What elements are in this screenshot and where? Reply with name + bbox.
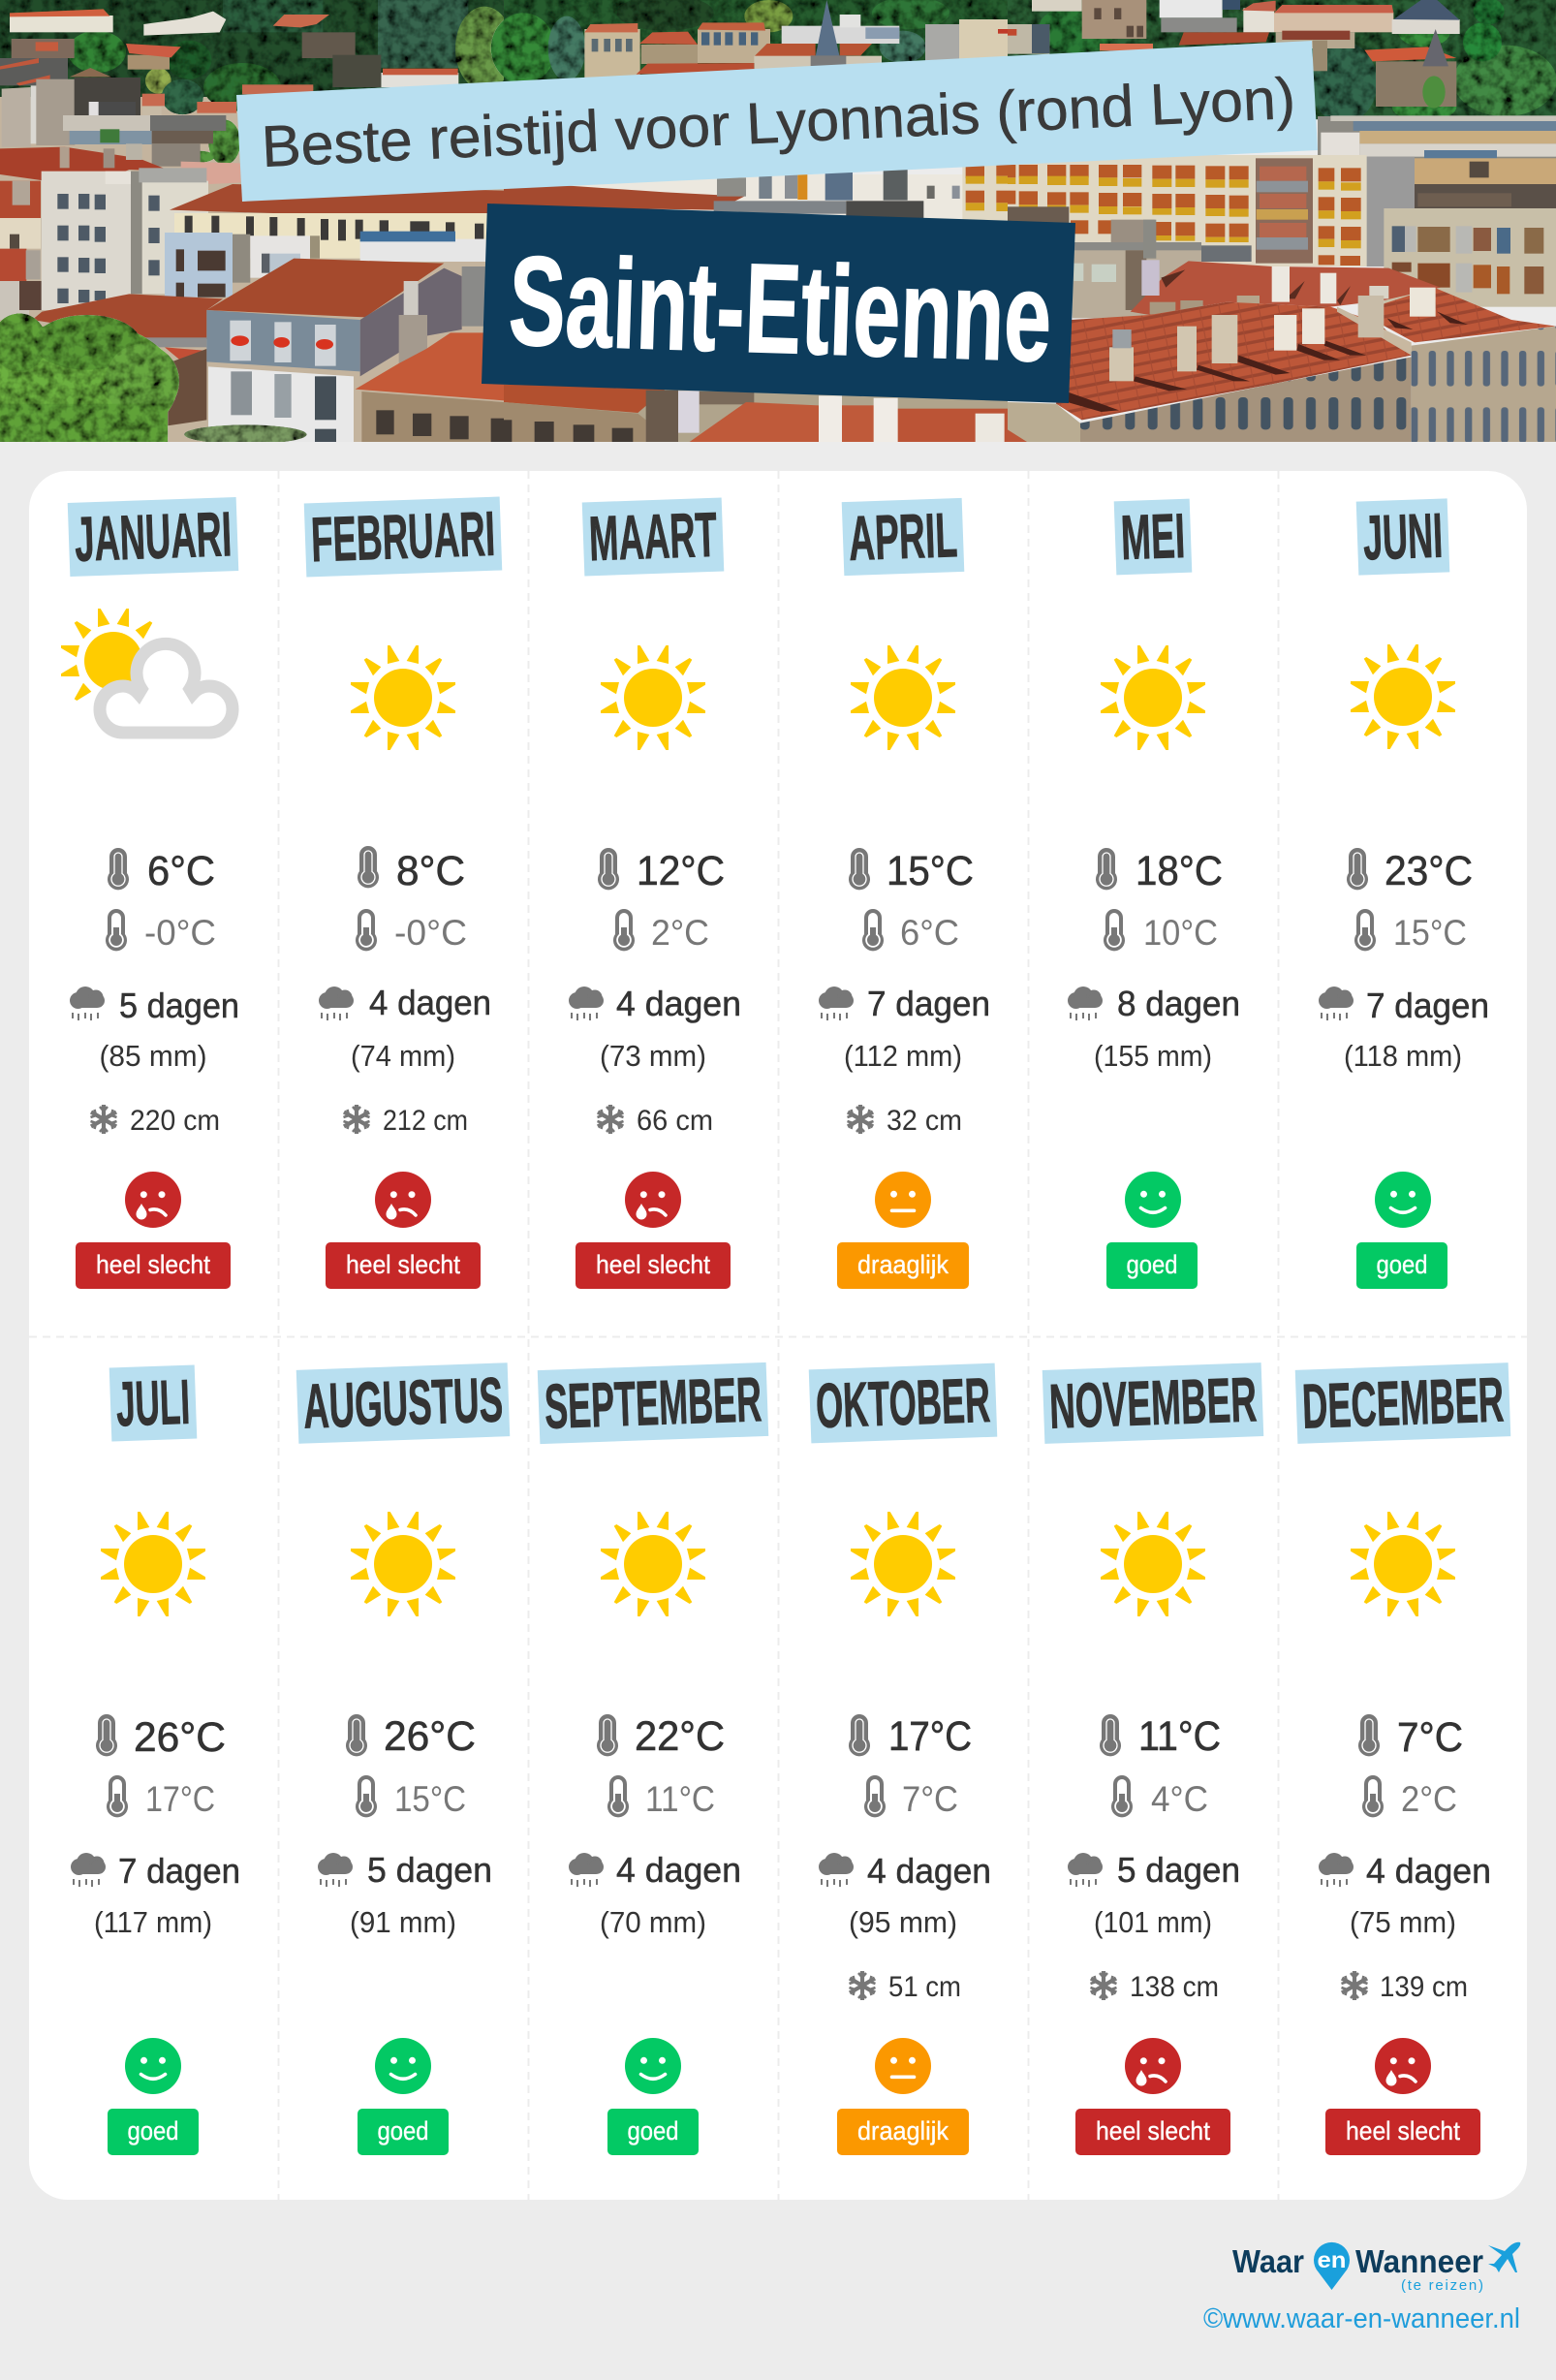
high temperature <box>108 848 215 894</box>
rating <box>1106 1172 1198 1289</box>
snow: 32 cm <box>887 1105 962 1137</box>
high temperature: 6°C <box>147 848 215 894</box>
rating <box>607 2038 699 2155</box>
month label: MAART <box>588 499 718 574</box>
panel: climate table card <box>29 471 1527 2200</box>
rain days: 5 dagen <box>367 1850 492 1890</box>
rain days: 4 dagen <box>616 1850 741 1890</box>
icon: map pin: en <box>1318 2247 1347 2272</box>
month label: NOVEMBER <box>1048 1363 1258 1442</box>
rain days <box>70 986 239 1025</box>
high temperature <box>598 848 725 894</box>
column: december <box>1295 1362 1510 2155</box>
snow <box>847 1105 962 1137</box>
icon: airplane <box>1488 2242 1520 2272</box>
rainfall: (74 mm) <box>351 1039 455 1073</box>
rainfall: (101 mm) <box>1094 1905 1212 1939</box>
logo: Waar en Wanneer: Wanneer <box>1355 2243 1483 2279</box>
low temperature: 15°C <box>394 1779 466 1819</box>
column: mei <box>1068 499 1240 1289</box>
rating: draaglijk <box>857 2116 949 2145</box>
low temperature <box>356 1775 466 1819</box>
rainfall: (70 mm) <box>600 1905 706 1939</box>
high temperature <box>1100 1713 1221 1760</box>
high temperature <box>1096 848 1223 894</box>
low temperature: 7°C <box>902 1779 958 1819</box>
month label <box>538 1362 768 1444</box>
icon: sun <box>851 1512 955 1616</box>
rating <box>326 1172 481 1289</box>
rating: goed <box>1126 1250 1178 1279</box>
rain days: 7 dagen <box>118 1851 240 1891</box>
icon: sun <box>1351 644 1455 749</box>
column: juli <box>71 1364 240 2155</box>
low temperature <box>607 1775 715 1819</box>
high temperature: 8°C <box>396 848 465 894</box>
snow <box>597 1105 713 1137</box>
rainfall: (118 mm) <box>1344 1039 1462 1073</box>
column: oktober <box>809 1363 997 2155</box>
rain days: 4 dagen <box>867 1851 991 1891</box>
rain days: 7 dagen <box>867 984 990 1023</box>
rainfall: (75 mm) <box>1350 1905 1456 1939</box>
month label: MEI <box>1120 500 1186 573</box>
month label <box>68 497 238 577</box>
month label: FEBRUARI <box>310 498 496 575</box>
month label <box>842 498 964 576</box>
rating: heel slecht <box>346 1250 460 1279</box>
column: november <box>1043 1362 1263 2155</box>
icon: sun <box>351 1512 455 1616</box>
high temperature <box>1347 848 1473 894</box>
rating <box>1075 2038 1230 2155</box>
rating <box>837 2038 969 2155</box>
rating <box>1325 2038 1480 2155</box>
month label <box>304 496 502 578</box>
snow: 212 cm <box>383 1105 468 1137</box>
month label <box>1043 1362 1263 1444</box>
logo: Waar en Wanneer: Waar <box>1232 2243 1304 2279</box>
icon: sun <box>1101 645 1205 750</box>
icon: sun <box>601 645 705 750</box>
low temperature <box>864 1775 958 1819</box>
month label <box>296 1362 510 1444</box>
high temperature: 26°C <box>134 1714 226 1761</box>
rain days: 8 dagen <box>1117 984 1240 1023</box>
low temperature <box>106 909 216 953</box>
high temperature: 11°C <box>1138 1713 1221 1760</box>
rating: heel slecht <box>1346 2116 1460 2145</box>
high temperature <box>849 1713 972 1760</box>
title banner <box>482 204 1075 403</box>
icon: sun <box>351 645 455 750</box>
rain days: 4 dagen <box>616 984 741 1023</box>
month label: APRIL <box>848 499 958 574</box>
column: juni <box>1319 498 1489 1289</box>
low temperature: 2°C <box>651 913 709 953</box>
month label <box>582 498 724 576</box>
high temperature: 18°C <box>1136 848 1223 894</box>
icon: partly cloudy <box>61 609 233 733</box>
low temperature: 6°C <box>900 913 959 953</box>
snow: 66 cm <box>637 1105 713 1137</box>
high temperature: 17°C <box>888 1713 972 1760</box>
icon: sun <box>851 645 955 750</box>
rain days <box>319 983 491 1022</box>
icon: sun <box>1351 1512 1455 1616</box>
high temperature: 22°C <box>635 1713 725 1760</box>
icon: map pin <box>1314 2242 1350 2290</box>
month label: AUGUSTUS <box>302 1363 504 1442</box>
rating <box>358 2038 449 2155</box>
low temperature <box>862 909 959 953</box>
rating: heel slecht <box>96 1250 210 1279</box>
high temperature <box>597 1713 725 1760</box>
rainfall: (85 mm) <box>99 1039 207 1073</box>
column: februari <box>304 496 502 1289</box>
rating <box>1356 1172 1447 1289</box>
month label: JUNI <box>1362 500 1444 573</box>
column: april <box>819 498 990 1289</box>
rating: heel slecht <box>596 1250 710 1279</box>
rating: goed <box>1376 1250 1428 1279</box>
snow <box>1091 1971 1219 2003</box>
month label <box>809 1363 997 1443</box>
low temperature: 10°C <box>1143 913 1218 953</box>
low temperature: -0°C <box>144 913 216 953</box>
column: januari <box>61 497 239 1289</box>
rainfall: (95 mm) <box>849 1905 957 1939</box>
rainfall: (112 mm) <box>844 1039 962 1073</box>
icon: sun <box>1101 1512 1205 1616</box>
column: augustus <box>296 1362 510 2155</box>
snow <box>343 1105 468 1137</box>
snow: 138 cm <box>1130 1971 1219 2003</box>
low temperature <box>356 909 467 953</box>
low temperature <box>1104 909 1218 953</box>
high temperature: 15°C <box>887 848 974 894</box>
low temperature: 15°C <box>1393 913 1467 953</box>
logo: Waar en Wanneer: (te reizen) <box>1401 2277 1483 2294</box>
rating <box>76 1172 231 1289</box>
high temperature <box>1358 1714 1463 1761</box>
header photo: Saint-Etienne cityscape <box>0 0 1556 448</box>
snow <box>91 1105 220 1137</box>
high temperature <box>849 848 974 894</box>
website url: ©www.waar-en-wanneer.nl <box>1203 2303 1520 2334</box>
snow <box>1341 1971 1468 2003</box>
title banner: Saint-Etienne <box>507 229 1053 389</box>
high temperature: 7°C <box>1397 1714 1463 1761</box>
low temperature: 4°C <box>1151 1779 1208 1819</box>
low temperature <box>1354 909 1467 953</box>
rainfall: (117 mm) <box>94 1905 212 1939</box>
icon: sun <box>101 1512 205 1616</box>
subtitle banner: Beste reistijd voor Lyonnais (rond Lyon) <box>260 66 1296 179</box>
rating <box>108 2038 199 2155</box>
high temperature: 23°C <box>1385 848 1473 894</box>
high temperature: 26°C <box>384 1713 476 1760</box>
low temperature: 17°C <box>145 1779 215 1819</box>
rainfall: (155 mm) <box>1094 1039 1212 1073</box>
low temperature <box>107 1775 215 1819</box>
logo: Waar en Wanneer <box>1232 2242 1520 2294</box>
month label: SEPTEMBER <box>544 1363 762 1442</box>
low temperature <box>1362 1775 1457 1819</box>
rating: goed <box>628 2116 678 2145</box>
low temperature: 2°C <box>1401 1779 1457 1819</box>
snow: 51 cm <box>888 1971 961 2003</box>
month label <box>1356 498 1449 576</box>
month label <box>109 1364 197 1442</box>
rating: goed <box>128 2116 178 2145</box>
rain days: 4 dagen <box>369 983 491 1022</box>
month label <box>1114 499 1192 575</box>
column: maart <box>569 498 741 1289</box>
low temperature <box>613 909 709 953</box>
low temperature: -0°C <box>394 913 467 953</box>
snow: 220 cm <box>130 1105 220 1137</box>
low temperature <box>1111 1775 1208 1819</box>
rating: goed <box>378 2116 428 2145</box>
rating: heel slecht <box>1096 2116 1210 2145</box>
rainfall: (91 mm) <box>350 1905 456 1939</box>
rating <box>576 1172 731 1289</box>
subtitle banner <box>236 41 1318 202</box>
rainfall: (73 mm) <box>600 1039 706 1073</box>
month label: JULI <box>115 1366 191 1439</box>
rain days: 7 dagen <box>1366 986 1489 1025</box>
rating: draaglijk <box>857 1250 949 1279</box>
rating <box>837 1172 969 1289</box>
icon: sun <box>601 1512 705 1616</box>
rain days: 5 dagen <box>119 986 239 1025</box>
snow: 139 cm <box>1380 1971 1468 2003</box>
snow <box>849 1971 961 2003</box>
month label: JANUARI <box>74 498 233 575</box>
column: september <box>538 1362 768 2155</box>
rain days: 5 dagen <box>1117 1850 1240 1890</box>
rain days: 4 dagen <box>1366 1851 1491 1891</box>
month label: OKTOBER <box>815 1364 991 1441</box>
high temperature <box>358 846 465 894</box>
high temperature: 12°C <box>637 848 725 894</box>
low temperature: 11°C <box>645 1779 715 1819</box>
